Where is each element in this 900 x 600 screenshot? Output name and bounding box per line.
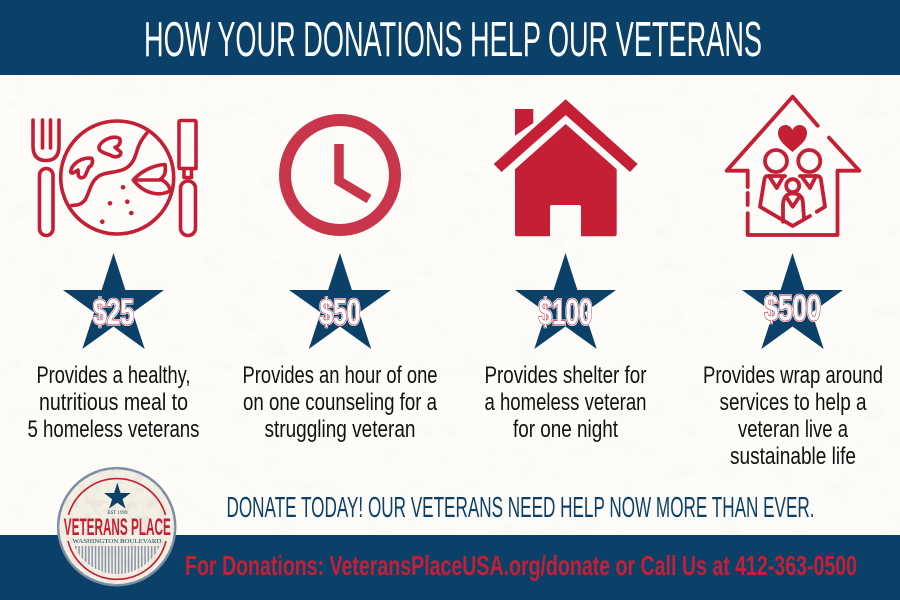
description: $50: Provides an hour of one xyxy=(242,362,438,389)
description: $500: veteran live a xyxy=(738,416,848,443)
description: $50: on one counseling for a xyxy=(243,389,438,416)
icon: heart xyxy=(778,125,807,152)
description: $500 xyxy=(703,362,883,470)
logo badge: VETERANS PLACE xyxy=(64,514,171,541)
logo badge: WASHINGTON BOULEVARD xyxy=(72,538,162,545)
description: $25: Provides a healthy, xyxy=(36,362,190,389)
star $500: $500 xyxy=(764,288,821,328)
footer band xyxy=(0,535,900,600)
description: $100: a homeless veteran xyxy=(484,389,646,416)
icon: family in house xyxy=(727,97,859,235)
icon: plate with fork and knife xyxy=(33,120,196,236)
description: $50 xyxy=(242,362,438,443)
logo badge: EST 1999 xyxy=(107,511,128,516)
icon: plate seasoning dots xyxy=(100,185,134,224)
header band xyxy=(0,0,900,75)
description: $100: for one night xyxy=(513,416,618,443)
logo star xyxy=(104,483,131,508)
star $100 xyxy=(515,253,616,349)
description: $50: struggling veteran xyxy=(264,416,416,443)
logo stripes xyxy=(75,546,160,574)
star $50 xyxy=(289,253,391,349)
star $25: $25 xyxy=(93,292,134,332)
icon: house xyxy=(494,99,638,236)
star $50: $50 xyxy=(320,292,360,332)
description: $25: nutritious meal to xyxy=(39,389,188,416)
logo badge xyxy=(58,468,176,586)
description: $500: sustainable life xyxy=(730,443,856,470)
description: $25 xyxy=(28,362,200,443)
description: $100: Provides shelter for xyxy=(484,362,646,389)
star $100: $100 xyxy=(538,292,592,332)
icon: clock xyxy=(285,120,395,230)
star $500 xyxy=(742,253,843,349)
description: $25: 5 homeless veterans xyxy=(28,416,200,443)
star $25 xyxy=(63,253,164,349)
description: $100 xyxy=(484,362,646,443)
